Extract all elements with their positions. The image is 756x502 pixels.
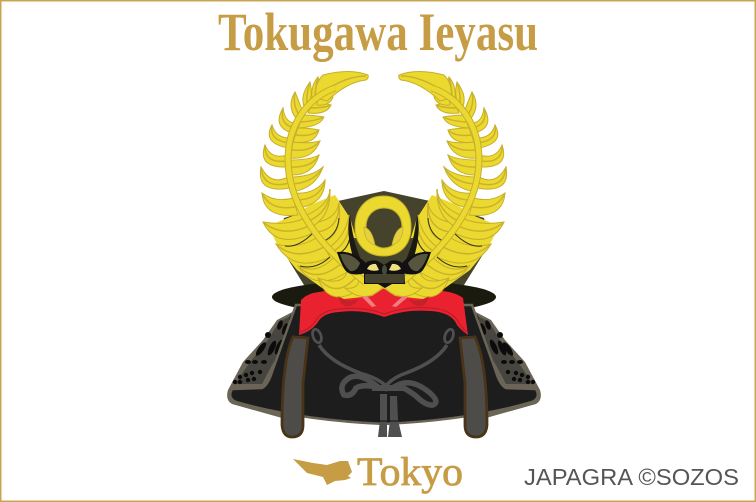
- Tokyo label: Tokyo: [357, 449, 463, 494]
- right crest frond: [383, 72, 507, 299]
- black horn supports: [348, 214, 419, 263]
- olive backing behind ring: [354, 238, 413, 268]
- visor highlights: [338, 296, 429, 307]
- chin cord: [311, 328, 455, 437]
- title: Tokugawa Ieyasu: [218, 2, 538, 62]
- Tokyo silhouette icon: [293, 459, 352, 485]
- neck guard: right plates: [468, 308, 541, 418]
- credit: JAPAGRA ©SOZOS: [524, 464, 739, 490]
- ring crest: [355, 196, 411, 256]
- helmet brim: [272, 280, 496, 314]
- helmet lower body: [230, 305, 538, 424]
- left side strap: [282, 337, 308, 437]
- visor trim line: [300, 308, 467, 332]
- red visor: [299, 288, 468, 335]
- left crest frond: [260, 72, 384, 299]
- illustration: samurai helmet: [227, 72, 541, 437]
- neck guard: left plates: [227, 308, 300, 418]
- demon mask: [337, 252, 431, 288]
- helmet bowl: [278, 191, 490, 285]
- right side strap: [460, 337, 487, 437]
